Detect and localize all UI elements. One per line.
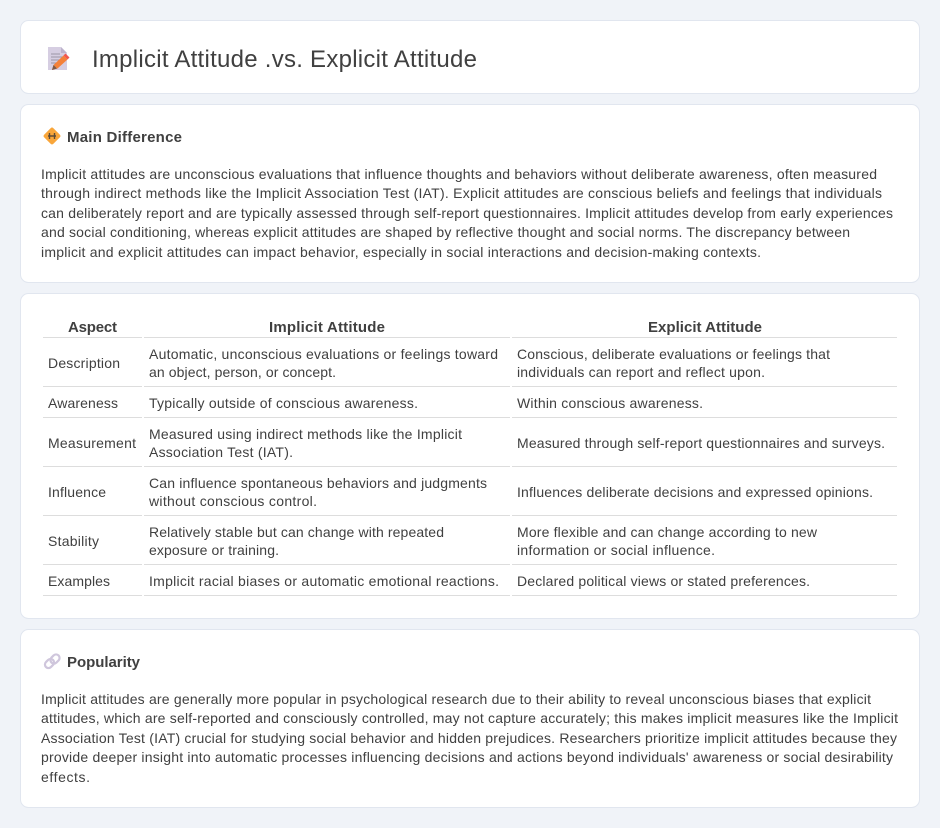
icon: memo with pencil xyxy=(48,47,70,70)
text block: main difference paragraph: can deliberately report and are typically assessed through self-report questionnaires. Implicit attitudes develop from early experiences xyxy=(41,205,893,221)
table header row: Implicit Attitude xyxy=(269,319,385,336)
text block: popularity paragraph: effects. xyxy=(41,769,90,785)
icon: diamond sign xyxy=(43,127,61,145)
table row: stability: Stability xyxy=(48,533,99,549)
panel: comparison table xyxy=(20,294,920,618)
table row: stability xyxy=(48,524,818,558)
text block: main difference paragraph: through indirect methods like the Implicit Association Test (IAT). Explicit attitudes are conscious beliefs and feelings that individuals xyxy=(41,185,882,201)
table row: stability: exposure or training. xyxy=(149,542,279,558)
text block: popularity paragraph xyxy=(41,691,898,785)
table row: measurement: Measured through self-report questionnaires and surveys. xyxy=(517,435,885,451)
table row: influence: without conscious control. xyxy=(148,493,317,509)
table row: awareness: Awareness xyxy=(48,395,118,411)
table row: influence: Influence xyxy=(48,484,106,500)
table row: stability: Relatively stable but can change with repeated xyxy=(149,524,444,540)
table row: awareness: Within conscious awareness. xyxy=(517,395,703,411)
table header row: Aspect xyxy=(68,319,117,336)
table header row xyxy=(68,319,762,336)
table row: examples xyxy=(48,573,810,589)
table row: influence xyxy=(48,475,873,509)
text block: main difference paragraph xyxy=(41,166,893,260)
table row: description: individuals can report and reflect upon. xyxy=(517,364,765,380)
table row: influence: Influences deliberate decisions and expressed opinions. xyxy=(517,484,873,500)
table row: measurement: Measurement xyxy=(48,435,136,451)
panel: title header xyxy=(20,20,920,94)
text block: popularity paragraph: attitudes, which are self-reported and consciously controlled, may not capture accurately; this makes implicit measures like the Implicit xyxy=(41,710,898,726)
table row: awareness: Typically outside of conscious awareness. xyxy=(149,395,418,411)
table row: stability: information or social influence. xyxy=(517,542,715,558)
table row: description: Description xyxy=(48,355,120,371)
table row: influence: Can influence spontaneous behaviors and judgments xyxy=(149,475,487,491)
table row: description xyxy=(48,346,830,380)
heading: main difference: Main Difference xyxy=(67,129,182,146)
table row: description: an object, person, or concept. xyxy=(149,364,336,380)
table row: examples: Declared political views or stated preferences. xyxy=(517,573,810,589)
table row: examples: Implicit racial biases or automatic emotional reactions. xyxy=(149,573,499,589)
table header row: Explicit Attitude xyxy=(648,319,762,336)
table row: measurement: Measured using indirect methods like the Implicit xyxy=(149,426,462,442)
text block: main difference paragraph: and social conditioning, whereas explicit attitudes are shaped by reflective thought and social norms. The discrepancy between xyxy=(41,224,850,240)
title: Implicit Attitude .vs. Explicit Attitude xyxy=(92,46,477,73)
table row: measurement: Association Test (IAT). xyxy=(149,444,293,460)
text block: main difference paragraph: Implicit attitudes are unconscious evaluations that influence thoughts and behaviors without deliberate awareness, often measured xyxy=(41,166,877,182)
panel: popularity xyxy=(20,630,920,808)
table row: awareness xyxy=(48,395,703,411)
table row: description: Automatic, unconscious evaluations or feelings toward xyxy=(149,346,498,362)
icon: chain link xyxy=(43,653,61,670)
text block: popularity paragraph: Association Test (IAT) crucial for studying social behavior and hidden prejudices. Researchers prioritize implicit attitudes because they xyxy=(41,730,897,746)
table row: examples: Examples xyxy=(48,573,110,589)
table row: description: Conscious, deliberate evaluations or feelings that xyxy=(517,346,830,362)
text block: main difference paragraph: implicit and explicit attitudes can impact behavior, especially in social interactions and decision-making contexts. xyxy=(41,244,761,260)
table row: stability: More flexible and can change according to new xyxy=(517,524,818,540)
panel: main difference xyxy=(20,104,920,282)
text block: popularity paragraph: provide deeper insight into automatic processes influencing decisions and actions beyond individuals' awareness or social desirability xyxy=(41,749,893,765)
text block: popularity paragraph: Implicit attitudes are generally more popular in psychological research due to their ability to reveal unconscious biases that explicit xyxy=(41,691,871,707)
heading: popularity: Popularity xyxy=(67,654,141,671)
table row: measurement xyxy=(48,426,885,460)
